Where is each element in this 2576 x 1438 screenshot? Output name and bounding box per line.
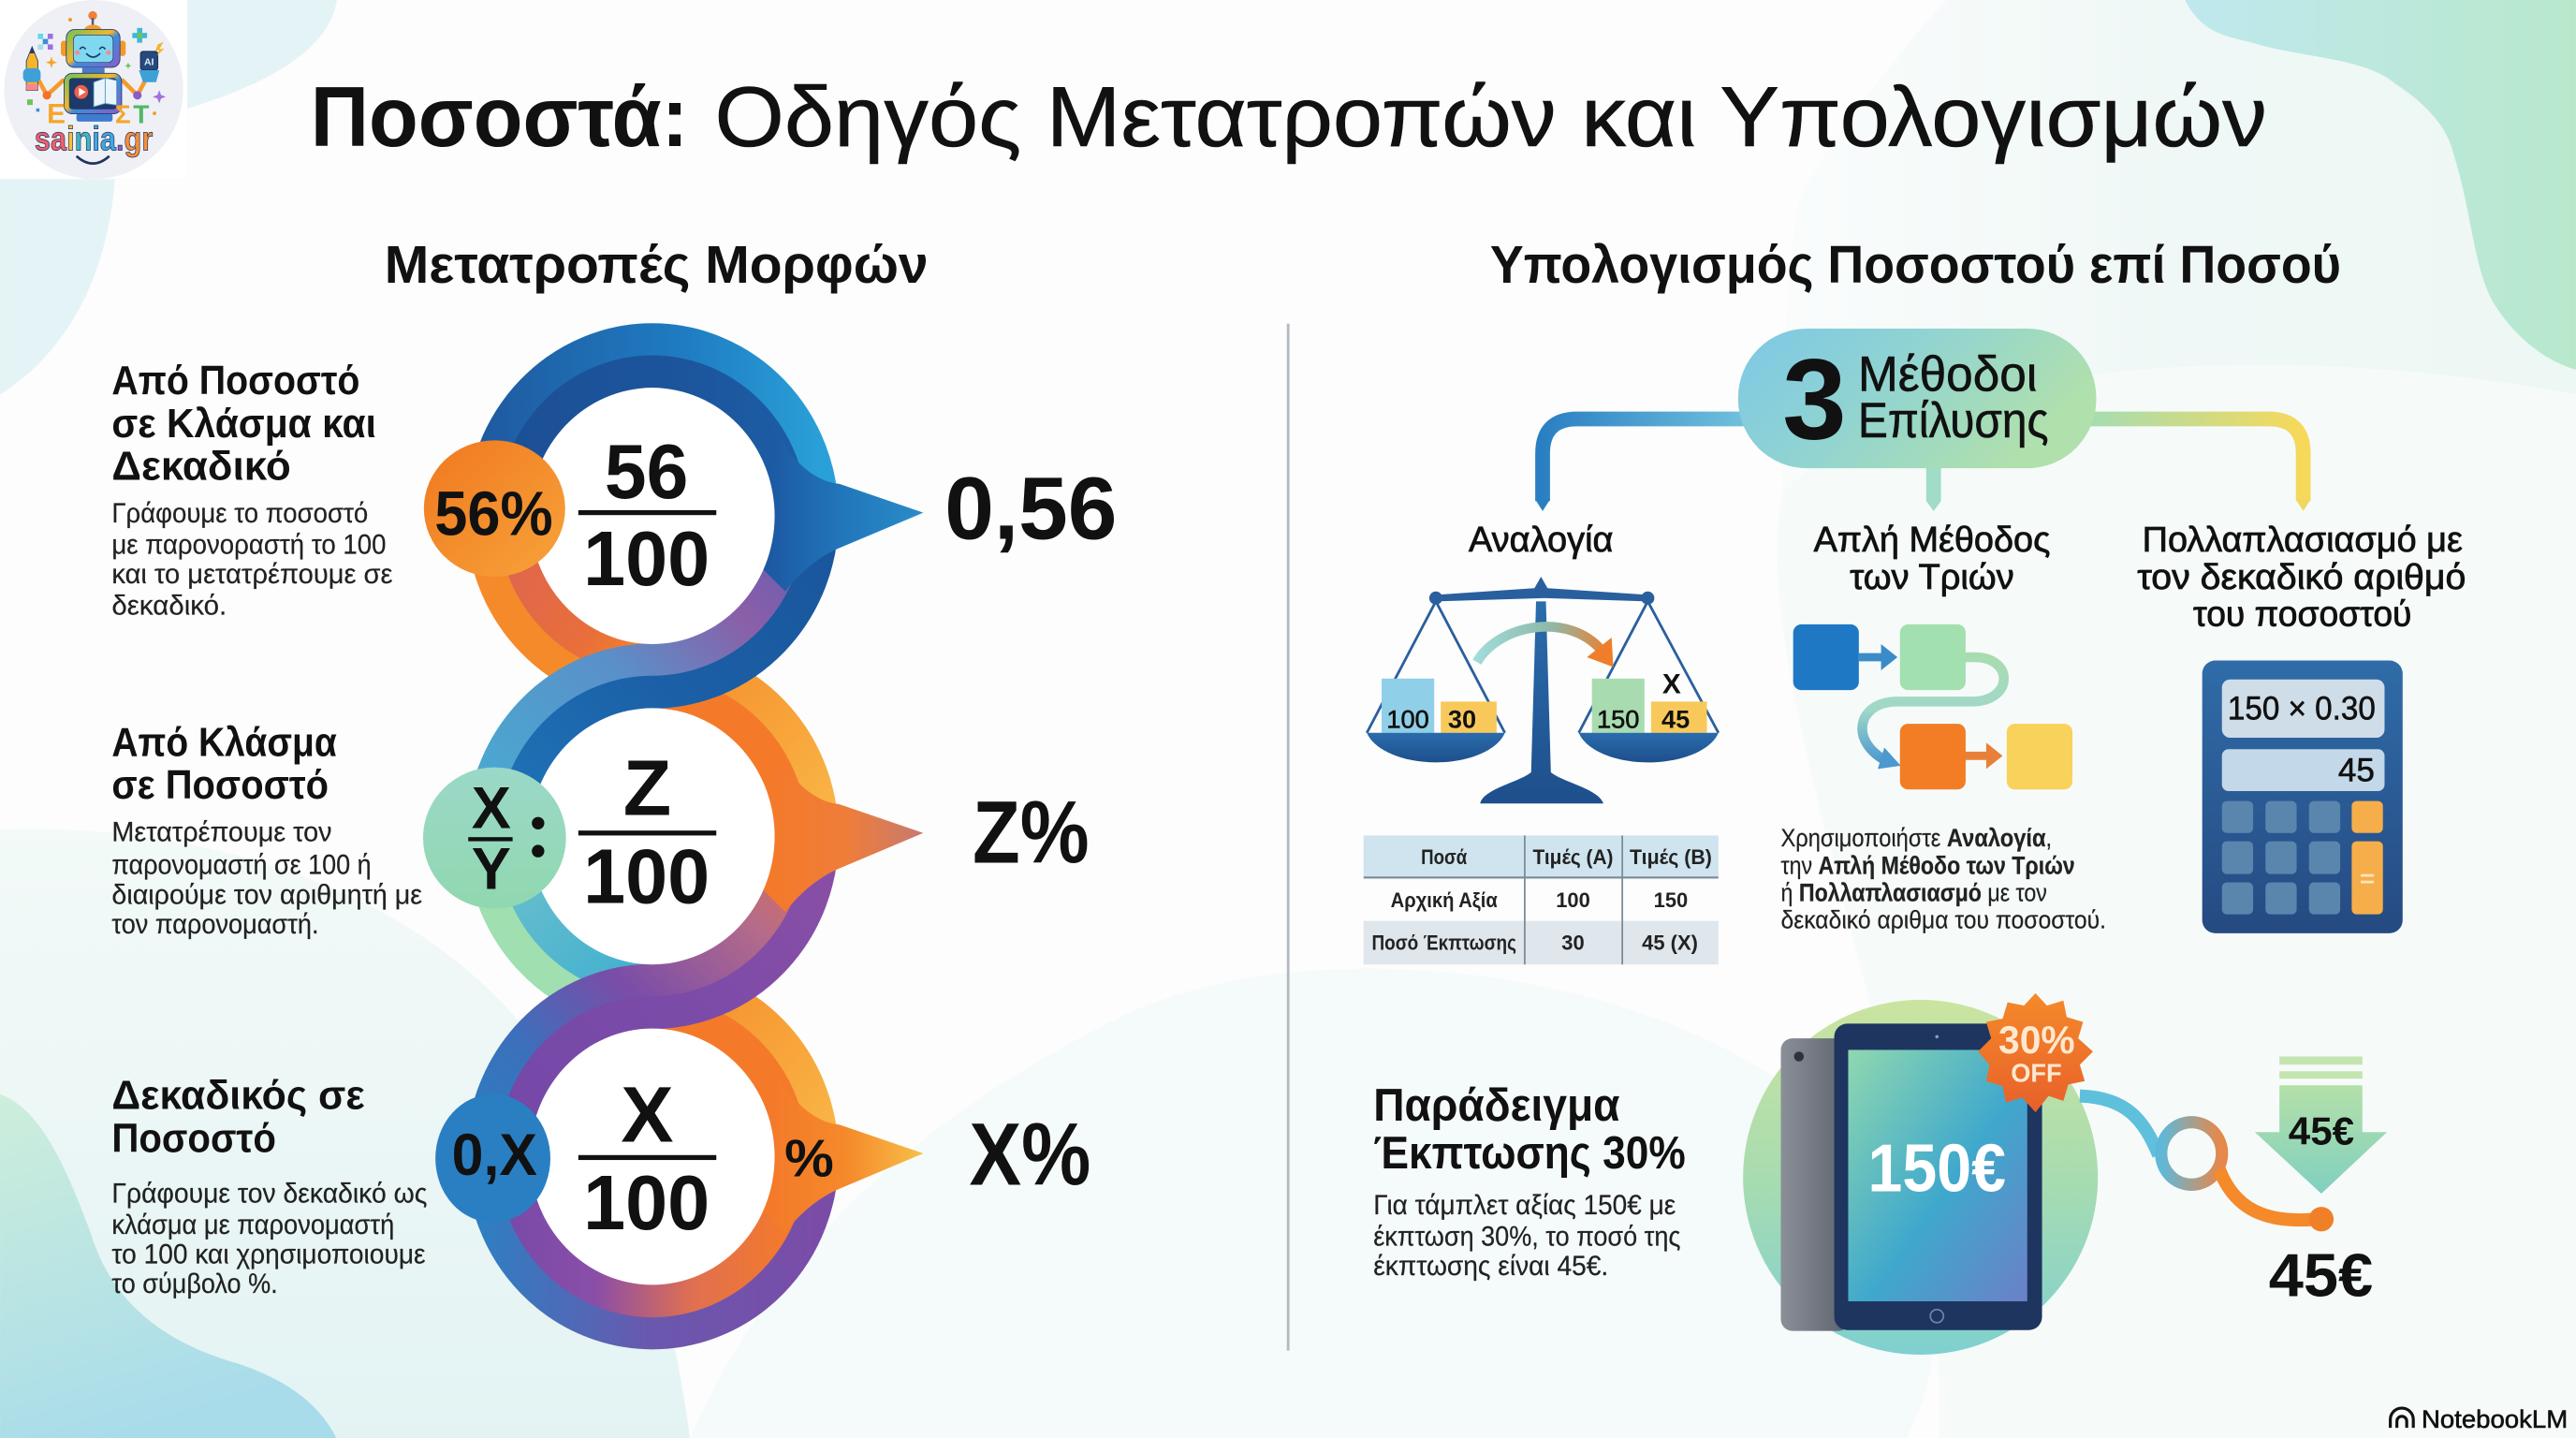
row 2 description: τον παρονομαστή. <box>111 909 319 940</box>
panel: percent of amount <box>1364 235 2466 1355</box>
row 1 description: και το μετατρέπουμε σε <box>111 559 393 590</box>
icon: robot: Σ <box>115 100 131 129</box>
node: 56% <box>424 440 565 577</box>
icon: calculator: 45 <box>2338 753 2375 789</box>
arrow: 45€ reduction: 45€ <box>2289 1108 2354 1152</box>
table: proportion values: Ποσά <box>1421 845 1468 869</box>
percent sign on ring: % <box>784 1129 834 1188</box>
badge: 3 methods: 3 <box>1782 336 1847 464</box>
fraction: 56/100: 56 <box>605 429 688 515</box>
result: 0,56: 0,56 <box>944 460 1117 559</box>
badge: 3 methods: Επίλυσης <box>1858 393 2049 448</box>
icon: calculator <box>2203 661 2403 933</box>
row 2: fraction to percent <box>111 719 1090 940</box>
node: 0,X <box>435 1094 550 1223</box>
method label: decimal multiplication: του ποσοστού <box>2193 594 2411 634</box>
row 2 heading: Από Κλάσμα <box>111 719 337 765</box>
row 1 description <box>111 498 393 621</box>
row 3 heading <box>111 1073 365 1161</box>
method label: proportion: Αναλογία <box>1469 520 1613 559</box>
icon: robot: Ε <box>47 99 66 130</box>
row 2 description: Μετατρέπουμε τον <box>111 817 332 848</box>
fraction: Z/100 <box>578 743 716 919</box>
fraction: Z/100: Z <box>623 743 671 831</box>
row 3 description: το σύμβολο %. <box>111 1269 278 1299</box>
row 3 description: Γράφουμε τον δεκαδικό ως <box>111 1179 427 1210</box>
result: X%: X% <box>970 1105 1090 1204</box>
example text: 30% discount: Για τάμπλετ αξίας 150€ με <box>1373 1190 1676 1221</box>
curve: price to discount <box>2080 1096 2334 1231</box>
icon: balance scale: 150 <box>1597 704 1639 733</box>
table: proportion values: Τιμές (Β) <box>1630 845 1712 869</box>
title: Ποσοστά: <box>311 69 688 165</box>
watermark: NotebookLM: NotebookLM <box>2422 1404 2568 1433</box>
connector: right branch <box>2089 419 2304 501</box>
row 2 description: παρονομαστή σε 100 ή <box>111 850 372 881</box>
title: Οδηγός Μετατροπών και Υπολογισμών <box>714 69 2267 165</box>
logo: sainia.gr <box>0 0 187 179</box>
icon: robot <box>23 11 166 130</box>
method label: rule of three <box>1814 520 2050 596</box>
icon: robot: AI <box>144 56 154 67</box>
method label: rule of three: Απλή Μέθοδος <box>1814 520 2050 559</box>
icon: calculator: 150 × 0.30 <box>2228 691 2376 727</box>
illustration: tablet on gradient circle: 150€ <box>1868 1131 2006 1206</box>
row 2 heading <box>111 719 337 808</box>
table: proportion values: Ποσό Έκπτωσης <box>1372 931 1516 954</box>
icon: balance scale: X <box>1662 669 1681 700</box>
row 3 description: κλάσμα με παρονομαστή <box>111 1210 394 1240</box>
logo wordmark: sainia.gr <box>35 120 153 158</box>
heading: conversions: Μετατροπές Μορφών <box>385 235 929 295</box>
method label: decimal multiplication <box>2137 520 2466 634</box>
example text: 30% discount: Παράδειγμα <box>1373 1080 1620 1131</box>
row 1 heading <box>111 358 376 489</box>
example text: 30% discount: έκπτωση 30%, το ποσό της <box>1373 1221 1680 1252</box>
connector: left branch <box>1543 419 1745 501</box>
node: 56%: 56% <box>434 479 553 549</box>
icon: rule of three flow <box>1793 624 2072 789</box>
fraction: X/100 <box>578 1071 716 1246</box>
badge: 3 methods: Μέθοδοι <box>1858 347 2037 403</box>
example text: 30% discount <box>1373 1080 1686 1282</box>
row 1 description: δεκαδικό. <box>111 590 227 621</box>
table: proportion values: 100 <box>1556 888 1590 912</box>
heading: percent of amount: Υπολογισμός Ποσοστού επί Ποσού <box>1490 235 2341 295</box>
row 1 description: Γράφουμε το ποσοστό <box>111 498 368 529</box>
row 3: decimal to percent <box>111 1071 1090 1299</box>
node: X/Y: Y <box>472 836 511 902</box>
text: method summary: δεκαδικό αριθμα του ποσοστού. <box>1781 905 2106 934</box>
badge: 3 methods <box>1738 329 2096 468</box>
connector tip: right branch <box>2296 500 2311 511</box>
fraction: X/100: 100 <box>583 1160 710 1246</box>
badge: 30% off <box>1978 993 2093 1112</box>
row 1 heading: Δεκαδικό <box>111 443 291 489</box>
row 3 heading: Ποσοστό <box>111 1115 276 1161</box>
row 1 description: με παρονοραστή το 100 <box>111 529 386 560</box>
row 3 description <box>111 1179 427 1299</box>
method label: decimal multiplication: Πολλαπλασιασμό με <box>2143 520 2463 559</box>
panel: form conversions <box>111 235 1117 1333</box>
fraction: Z/100: 100 <box>583 833 710 919</box>
node: X/Y <box>423 768 566 909</box>
chart: chained percent rings <box>482 340 923 1333</box>
badge: 30% off: OFF <box>2011 1059 2062 1088</box>
row 1 heading: Από Ποσοστό <box>111 358 359 404</box>
row 2 description: διαιρούμε τον αριθμητή με <box>111 879 422 910</box>
method label: decimal multiplication: τον δεκαδικό αριθμό <box>2137 557 2466 596</box>
node: 0,X: 0,X <box>452 1123 537 1188</box>
result: Z%: Z% <box>973 783 1090 882</box>
example text: 30% discount: έκπτωσης είναι 45€. <box>1373 1251 1608 1282</box>
icon: balance scale: 30 <box>1448 704 1476 733</box>
row 2 description <box>111 817 422 940</box>
text: method summary: ή Πολλαπλασιασμό με τον <box>1781 878 2047 907</box>
table: proportion values <box>1364 835 1719 964</box>
fraction: X/100: X <box>621 1071 674 1159</box>
connector: middle branch <box>1926 466 1941 511</box>
icon: robot: Τ <box>133 100 149 129</box>
row 2 heading: σε Ποσοστό <box>111 762 329 808</box>
text: method summary: Χρησιμοποιήστε Αναλογία, <box>1781 823 2052 852</box>
badge: 30% off: 30% <box>1998 1018 2075 1062</box>
illustration: tablet on gradient circle <box>1743 1000 2098 1355</box>
table: proportion values: 150 <box>1654 888 1688 912</box>
text: method summary: την Απλή Μέθοδο των Τριών <box>1781 851 2075 880</box>
table: proportion values: Αρχική Αξία <box>1391 888 1498 912</box>
example text: 30% discount: Έκπτωσης 30% <box>1373 1128 1686 1179</box>
table: proportion values: 45 (Χ) <box>1642 931 1698 954</box>
text: method summary <box>1781 823 2106 934</box>
method label: rule of three: των Τριών <box>1850 557 2014 596</box>
arrow: 45€ reduction <box>2255 1056 2387 1194</box>
row 1 heading: σε Κλάσμα και <box>111 401 376 447</box>
fraction: 56/100 <box>578 429 716 602</box>
row 3 heading: Δεκαδικός σε <box>111 1073 365 1119</box>
table: proportion values: Τιμές (Α) <box>1532 845 1613 869</box>
connector tip: left branch <box>1535 500 1550 511</box>
row 3 description: το 100 και χρησιμοποιουμε <box>111 1240 426 1270</box>
table: proportion values: 30 <box>1561 931 1585 954</box>
icon: balance scale <box>1367 577 1719 803</box>
row 1: percent to fraction and decimal <box>111 358 1117 621</box>
icon: balance scale: 100 <box>1386 704 1429 733</box>
node: X/Y: X <box>472 776 511 842</box>
icon: balance scale: 45 <box>1661 704 1690 733</box>
result: 45€: 45€ <box>2269 1241 2373 1310</box>
fraction: 56/100: 100 <box>583 516 710 602</box>
